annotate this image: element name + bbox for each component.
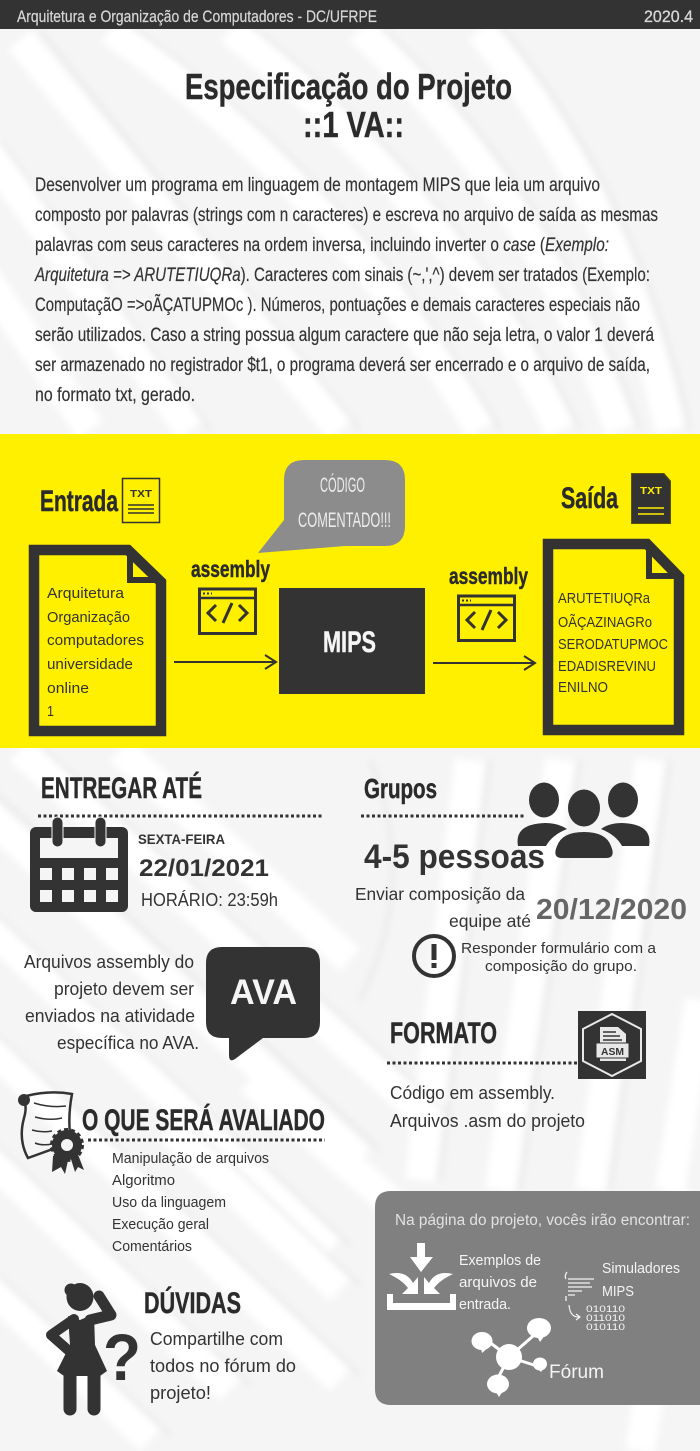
icon: code to binary: 011010 <box>586 1313 625 1323</box>
deadline text: SEXTA-FEIRA <box>138 831 225 847</box>
input document: universidade <box>47 656 133 673</box>
text: format details: Código em assembly. <box>390 1083 555 1103</box>
arrow: MIPS to output <box>433 656 535 670</box>
section: groups <box>355 773 687 976</box>
list: criteria: Algoritmo <box>112 1172 175 1189</box>
text: forum hint: projeto! <box>150 1383 211 1403</box>
label: assembly right: assembly <box>449 563 528 589</box>
output document: OÃÇAZINAGRo <box>558 614 652 631</box>
heading: what will be evaluated: O QUE SERÁ AVALIADO <box>82 1103 325 1137</box>
icon: download <box>387 1243 456 1310</box>
heading: Entrada: Entrada <box>40 485 118 518</box>
section: format <box>387 1011 646 1131</box>
output document: SERODATUPMOC <box>558 636 668 653</box>
title: Especificação do Projeto <box>185 66 512 107</box>
text: AVA submission: projeto devem ser <box>54 979 194 999</box>
text: simulators: MIPS <box>602 1283 634 1300</box>
icon: TXT input: TXT <box>130 489 152 500</box>
heading: Saída: Saída <box>561 482 618 515</box>
icon: code window left <box>199 589 256 634</box>
input document <box>34 550 161 731</box>
deadline text <box>138 831 278 910</box>
speech bubble: commented code: COMENTADO!!! <box>298 509 391 532</box>
title: ::1 VA:: <box>303 104 404 145</box>
input document: online <box>47 680 89 697</box>
speech bubble: commented code <box>258 460 405 553</box>
list: criteria: Manipulação de arquivos <box>112 1150 269 1167</box>
speech bubble: commented code: CÓDIGO <box>320 474 365 497</box>
heading: Dúvidas: DÚVIDAS <box>144 1286 241 1320</box>
output document: EDADISREVINU <box>558 658 656 675</box>
heading: Entregar até: ENTREGAR ATÉ <box>41 771 202 805</box>
deadline text: 22/01/2021 <box>139 855 269 882</box>
icon: code to binary: 010110 <box>586 1304 625 1314</box>
text: forum: Fórum <box>549 1362 604 1383</box>
text: form note <box>461 940 657 975</box>
project description <box>34 175 658 406</box>
icon: person with question <box>51 1283 141 1409</box>
list: criteria: Uso da linguagem <box>112 1194 226 1211</box>
output document: ARUTETIUQRa <box>558 590 651 607</box>
text: simulators <box>602 1260 680 1300</box>
icon: AVA bubble: AVA <box>230 973 297 1012</box>
text: forum hint: todos no fórum do <box>150 1356 296 1376</box>
output document <box>548 544 679 730</box>
output document: ENILNO <box>558 679 608 696</box>
panel heading: Na página do projeto, vocês irão encontrar: <box>395 1212 690 1229</box>
text: AVA submission: enviados na atividade <box>25 1006 195 1026</box>
list: criteria <box>112 1150 269 1255</box>
course name: Arquitetura e Organização de Computadores - DC/UFRPE <box>17 7 377 26</box>
icon: AVA bubble <box>206 947 320 1060</box>
text: format details <box>390 1083 585 1131</box>
text: AVA submission: Arquivos assembly do <box>24 952 194 972</box>
text: form note: Responder formulário com a <box>461 940 657 957</box>
list: criteria: Execução geral <box>112 1216 209 1233</box>
text: group size: 4-5 pessoas <box>364 838 545 876</box>
text: input examples: entrada. <box>459 1296 511 1313</box>
text: format details: Arquivos .asm do projeto <box>390 1111 585 1131</box>
semester: 2020.4 <box>644 7 693 26</box>
input document: 1 <box>47 703 54 720</box>
icon: forum network <box>472 1318 551 1397</box>
text: AVA submission: específica no AVA. <box>57 1033 199 1053</box>
text: input examples: Exemplos de <box>459 1252 541 1269</box>
icon: code to binary <box>565 1272 625 1332</box>
input document: computadores <box>47 632 144 649</box>
icon: people <box>518 782 649 858</box>
text: input examples <box>459 1252 541 1313</box>
panel: project page resources <box>375 1191 700 1405</box>
text: forum hint: Compartilhe com <box>150 1329 283 1349</box>
icon: code to binary: 010110 <box>586 1322 625 1332</box>
title <box>185 66 512 145</box>
text: input examples: arquivos de <box>459 1274 537 1291</box>
project description: palavras com seus caracteres na ordem inversa, incluindo inverter o case (Exemplo: <box>35 235 609 256</box>
section: questions <box>51 1283 296 1409</box>
text: send composition: equipe até <box>449 911 531 931</box>
input document: Arquitetura <box>47 585 125 602</box>
icon: ASM file: ASM <box>601 1046 624 1058</box>
header bar <box>0 0 700 29</box>
icon: TXT output: TXT <box>640 486 662 497</box>
box: MIPS: MIPS <box>323 626 376 659</box>
icon: calendar <box>30 817 128 912</box>
text: simulators: Simuladores <box>602 1260 680 1277</box>
icon: TXT input <box>122 478 160 522</box>
label: assembly left: assembly <box>191 556 270 582</box>
heading: Formato: FORMATO <box>390 1017 497 1050</box>
project description: no formato txt, gerado. <box>35 385 195 406</box>
box: MIPS <box>279 588 425 694</box>
text: forum hint <box>150 1329 296 1403</box>
text: composition date: 20/12/2020 <box>536 894 687 926</box>
icon: code window right <box>458 596 515 640</box>
section: deadline <box>30 771 323 912</box>
panel: yellow flow diagram <box>0 434 700 748</box>
heading: Grupos: Grupos <box>364 773 437 804</box>
icon: person with question: ? <box>103 1320 141 1394</box>
input document: Organização <box>47 609 130 626</box>
section: evaluation <box>18 1092 325 1255</box>
icon: alert <box>414 936 454 976</box>
text: send composition <box>355 884 531 931</box>
text: send composition: Enviar composição da <box>355 884 525 904</box>
icon: ASM file <box>578 1011 646 1079</box>
icon: certificate <box>18 1092 84 1174</box>
text: form note: composição do grupo. <box>485 958 637 975</box>
list: criteria: Comentários <box>112 1238 192 1255</box>
text: AVA submission <box>24 952 199 1053</box>
deadline text: HORÁRIO: 23:59h <box>141 890 278 910</box>
icon: TXT output <box>632 474 670 524</box>
arrow: input to MIPS <box>174 655 276 669</box>
